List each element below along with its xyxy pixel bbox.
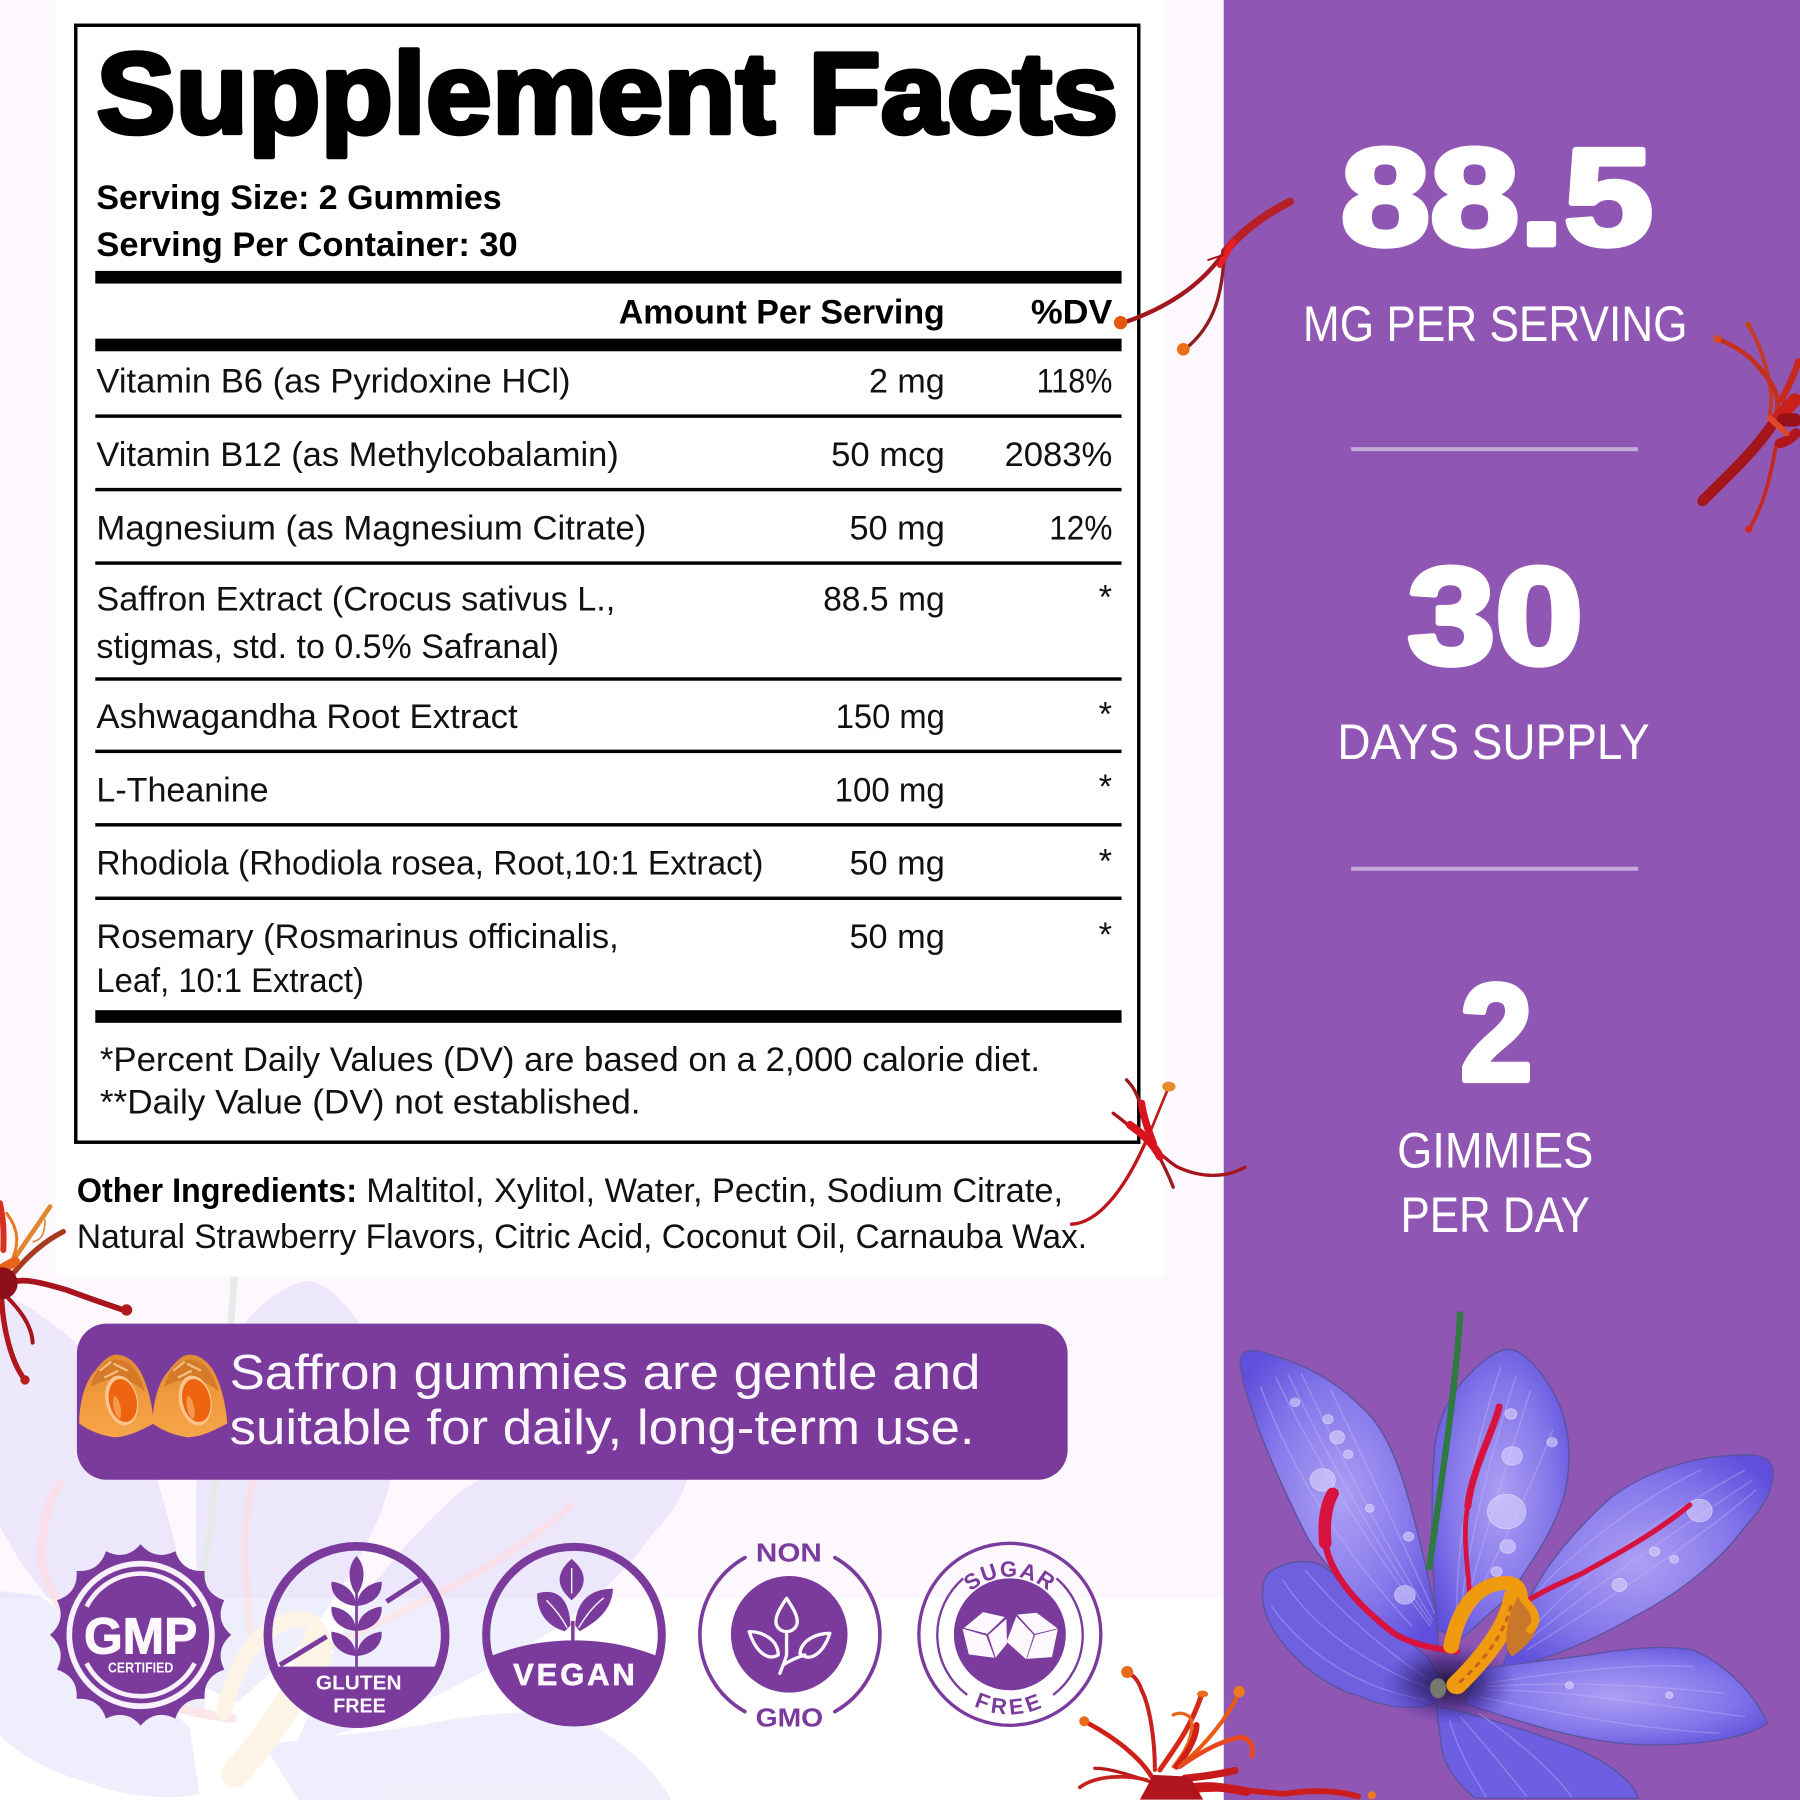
icon: vegan badge: VEGAN [513, 1657, 635, 1692]
saffron thread: right edge [1703, 322, 1798, 533]
column header: percent DV: %DV [1031, 294, 1112, 332]
stat: 88.5 mg per serving: 88.5 [1341, 121, 1653, 275]
icon: gummies [79, 1355, 227, 1437]
other ingredients text: Maltitol, Xylitol, Water, Pectin, Sodium Citrate, [366, 1172, 1063, 1210]
row: ashwagandha: 150 mg [836, 698, 945, 736]
other ingredients text: Natural Strawberry Flavors, Citric Acid, Coconut Oil, Carnauba Wax. [77, 1218, 1087, 1256]
row: vitamin B6: Vitamin B6 (as Pyridoxine HCl) [96, 363, 571, 401]
white panel behind table [55, 0, 1164, 1277]
row: rhodiola: 50 mg [849, 845, 945, 883]
icon: gluten free badge: GLUTEN [316, 1671, 402, 1694]
saffron thread: table corner [1072, 1080, 1245, 1224]
row: vitamin B6 [96, 363, 1112, 401]
callout text: suitable for daily, long-term use. [230, 1400, 975, 1455]
row: rhodiola [96, 842, 1112, 883]
callout text [230, 1345, 980, 1455]
saffron crocus flower [1240, 1312, 1773, 1798]
row: magnesium: 12% [1049, 510, 1112, 548]
row: vitamin B12: 2083% [1004, 436, 1112, 474]
row: saffron extract: 88.5 mg [823, 581, 945, 619]
row: L-theanine: * [1099, 768, 1112, 806]
row: rhodiola: * [1099, 842, 1112, 880]
background: lower white band [0, 1598, 1224, 1800]
row: ashwagandha: * [1099, 696, 1112, 734]
row: L-theanine: 100 mg [835, 771, 945, 809]
footnotes: **Daily Value (DV) not established. [100, 1084, 641, 1122]
row: rosemary: * [1099, 916, 1112, 954]
icon: sugar free badge [917, 1542, 1102, 1727]
row: magnesium [96, 510, 1112, 548]
other ingredients text: Other Ingredients: [77, 1172, 357, 1210]
row: vitamin B12: 50 mcg [831, 436, 945, 474]
ghost saffron flower watermark [0, 1223, 690, 1800]
flower stem [1429, 1312, 1460, 1570]
row: ashwagandha: Ashwagandha Root Extract [96, 698, 518, 736]
stat: 2 gummies per day [1397, 956, 1593, 1243]
row: rosemary: Leaf, 10:1 Extract) [96, 962, 364, 1000]
row: vitamin B12 [96, 436, 1112, 474]
background: left tinted area [0, 0, 1224, 1598]
icon: GMP certified badge: GMP [84, 1607, 197, 1664]
row: rhodiola: Rhodiola (Rhodiola rosea, Root,10:1 Extract) [96, 845, 763, 883]
row: vitamin B6: 118% [1037, 363, 1112, 401]
stat: 88.5 mg per serving [1303, 121, 1688, 352]
stat: 2 gummies per day: 2 [1460, 956, 1533, 1110]
bottom thick rule [95, 1010, 1122, 1023]
footnotes: *Percent Daily Values (DV) are based on a 2,000 calorie diet. [100, 1041, 1040, 1079]
row: saffron extract: Saffron Extract (Crocus sativus L., [96, 581, 615, 619]
row: magnesium: Magnesium (as Magnesium Citrate) [96, 510, 646, 548]
row: magnesium: 50 mg [849, 510, 945, 548]
panel: supplement facts table [76, 25, 1139, 1142]
row: L-theanine [96, 768, 1112, 809]
stat: 2 gummies per day: PER DAY [1401, 1186, 1590, 1243]
row: ashwagandha [96, 696, 1112, 736]
callout: gentle daily use [77, 1324, 1068, 1480]
row: saffron extract: * [1099, 578, 1112, 616]
icon: non GMO badge: NON [756, 1538, 822, 1568]
row: rosemary: Rosemary (Rosmarinus officinalis, [96, 918, 619, 956]
second thick rule [95, 339, 1122, 351]
row: vitamin B12: Vitamin B12 (as Methylcobalamin) [96, 436, 619, 474]
icon: non GMO badge: GMO [756, 1703, 823, 1733]
row: saffron extract [96, 578, 1112, 666]
stat: 30 days supply [1337, 540, 1650, 770]
top thick rule [95, 271, 1122, 284]
icon: gluten free badge: FREE [333, 1695, 386, 1718]
stat: 88.5 mg per serving: MG PER SERVING [1303, 295, 1687, 352]
saffron thread: top center [1114, 202, 1290, 356]
row: saffron extract: stigmas, std. to 0.5% Safranal) [96, 628, 559, 666]
right purple column [1224, 0, 1800, 1800]
column header: amount: Amount Per Serving [619, 294, 945, 332]
row: vitamin B6: 2 mg [869, 363, 945, 401]
stat: 30 days supply: 30 [1407, 540, 1583, 694]
icon: GMP certified badge: CERTIFIED [108, 1660, 173, 1677]
icon: GMP certified badge [50, 1544, 231, 1726]
servings per container: Serving Per Container: 30 [96, 226, 518, 264]
callout text: Saffron gummies are gentle and [230, 1345, 980, 1400]
other ingredients text [77, 1172, 1087, 1256]
saffron thread: left edge [0, 1203, 132, 1385]
footnotes [100, 1041, 1040, 1122]
row: L-theanine: L-Theanine [96, 771, 269, 809]
icon: sugar free badge: SUGAR [964, 1561, 1054, 1590]
icon: non GMO badge [700, 1538, 880, 1733]
serving size: Serving Size: 2 Gummies [96, 179, 502, 217]
icon: sugar free badge: FREE [975, 1692, 1042, 1715]
heading: supplement facts: Supplement Facts [96, 30, 1118, 158]
row: rosemary: 50 mg [849, 918, 945, 956]
stat: 2 gummies per day: GIMMIES [1397, 1121, 1593, 1178]
saffron thread: bottom [1079, 1666, 1376, 1800]
stat: 30 days supply: DAYS SUPPLY [1337, 713, 1650, 770]
callout background [77, 1324, 1068, 1480]
icon: gluten free badge [268, 1546, 445, 1728]
row: rosemary [96, 916, 1112, 1000]
table border [76, 25, 1139, 1142]
icon: vegan badge [486, 1547, 662, 1724]
